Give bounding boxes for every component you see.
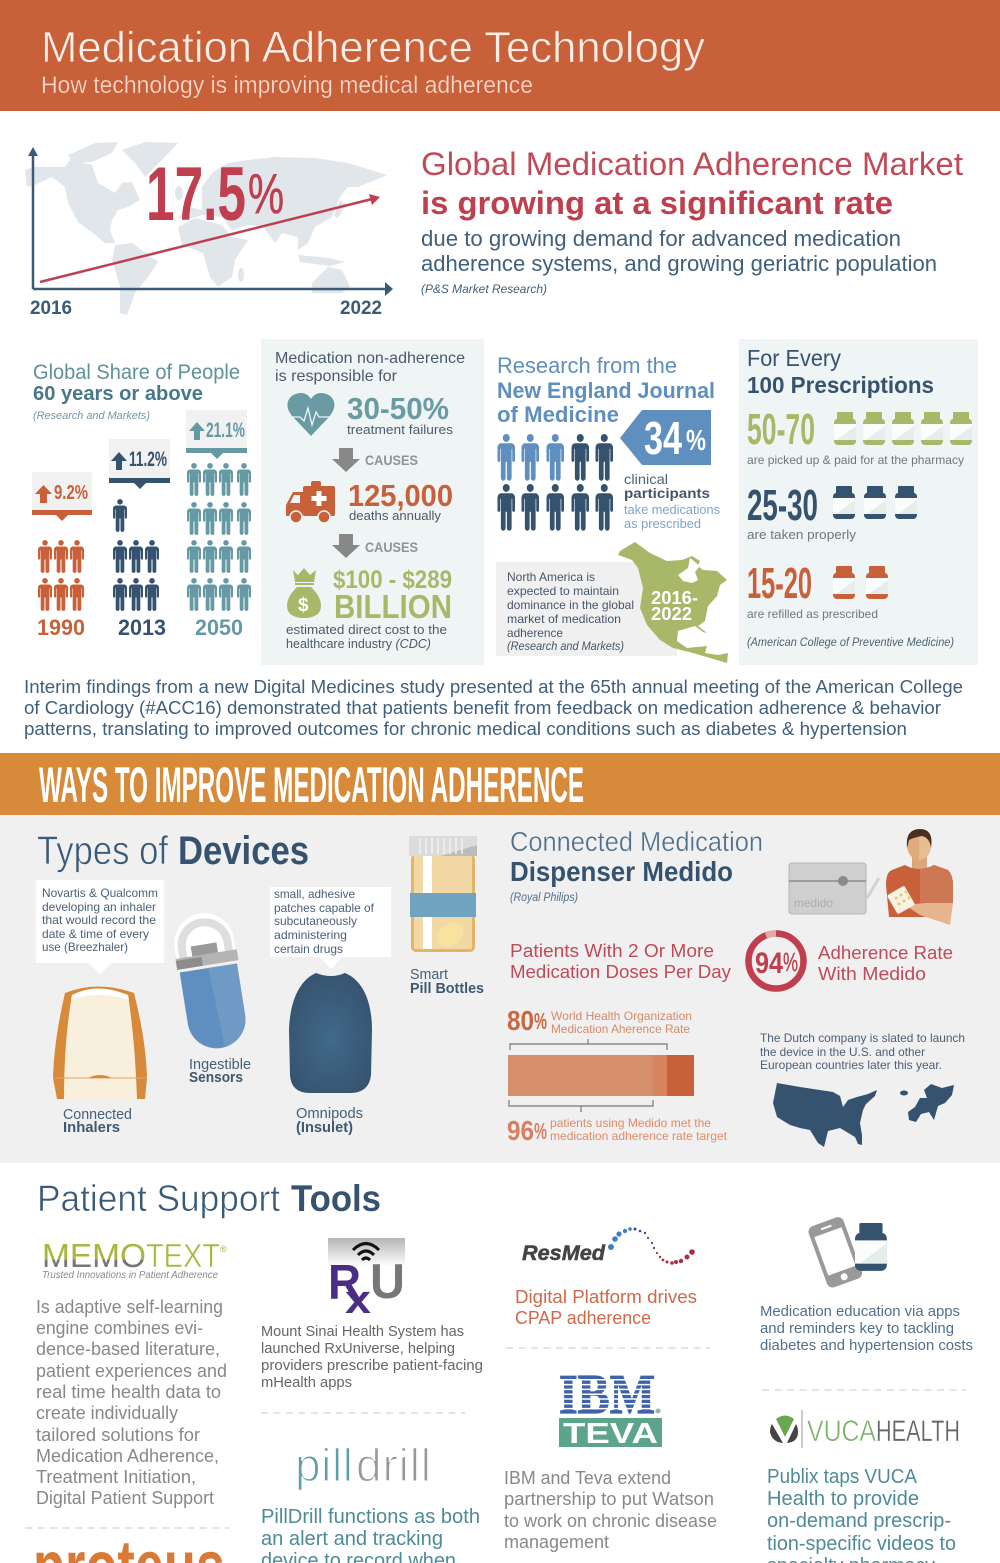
logo: VUCA Health: HEALTH [876, 1415, 960, 1448]
icon: dispenser device: medido [794, 896, 833, 910]
96 percent label [507, 1115, 728, 1146]
callout: inhaler: developing an inhaler [42, 900, 156, 914]
panel: for every 100 prescriptions [739, 339, 978, 665]
Memotext description: create individually [36, 1403, 178, 1423]
Memotext description: Treatment Initiation, [36, 1467, 196, 1487]
Memotext description [36, 1297, 227, 1508]
Memotext description: tailored solutions for [36, 1425, 200, 1445]
heading [37, 829, 309, 873]
heading: Devices [178, 829, 309, 873]
market growth heading: Global Medication Adherence Market [421, 146, 963, 182]
RxU description [261, 1324, 483, 1391]
tool: IBM and Teva [504, 1364, 717, 1552]
RxU description: launched RxUniverse, helping [261, 1341, 455, 1357]
tool: Memotext [36, 1237, 227, 1508]
logo: IBM Teva [555, 1364, 662, 1450]
panel heading: Medication non-adherence [275, 350, 465, 367]
96 percent label: medication adherence rate target [550, 1129, 728, 1143]
panel: non-adherence consequences [261, 339, 484, 665]
interim findings paragraph [24, 676, 963, 739]
2013 column: 11.2% [129, 448, 167, 471]
callout: patches: subcutaneously [274, 914, 357, 928]
IBM Teva description [504, 1468, 717, 1552]
trend arrow [40, 198, 376, 282]
VUCA description: Publix taps VUCA [767, 1466, 918, 1488]
panel: global share of people 60+ [32, 361, 251, 640]
market growth heading: is growing at a significant rate [421, 185, 893, 221]
96 percent label: patients using Medido met the [550, 1116, 711, 1130]
patients heading: Medication Doses Per Day [510, 962, 731, 982]
row: taken properly: are taken properly [747, 527, 857, 542]
apps description: Medication education via apps [760, 1304, 960, 1320]
participants text: clinical [624, 471, 668, 487]
ResMed description: CPAP adherence [515, 1307, 651, 1328]
device labels: Sensors [189, 1070, 243, 1086]
map: North America: 2022 [651, 604, 692, 624]
IBM Teva description: to work on chronic disease [504, 1511, 717, 1531]
row: picked up: are picked up & paid for at the pharmacy [747, 453, 964, 467]
interim findings paragraph: of Cardiology (#ACC16) demonstrated that patients benefit from feedback on medication adherence & behavior [24, 697, 941, 718]
source: (American College of Preventive Medicine) [747, 637, 954, 649]
Memotext description: Digital Patient Support [36, 1488, 214, 1508]
logo: IBM Teva: IBM [559, 1364, 655, 1426]
device labels: Smart [410, 967, 448, 983]
Memotext description: patient experiences and [36, 1361, 227, 1381]
North America box [496, 562, 677, 656]
icon: pill bottle [409, 836, 477, 952]
participants text [624, 471, 720, 531]
callout: inhaler: that would record the [42, 913, 156, 927]
icon: money bag: $ [298, 595, 309, 616]
header banner [0, 0, 1000, 111]
callout: patches [270, 887, 391, 969]
panel: Medido dispenser [507, 826, 965, 1147]
2013 column: 2013 [118, 615, 166, 640]
34 percent tag: % [686, 425, 706, 457]
IBM Teva description: management [504, 1532, 609, 1552]
logo: RxU: U [370, 1255, 405, 1309]
heading: Connected Medication [510, 826, 763, 857]
heading: Types of [37, 829, 169, 873]
logo: IBM Teva: TEVA [563, 1418, 658, 1450]
1990 column: 1990 [37, 615, 85, 640]
tool: RxUniverse [261, 1238, 483, 1391]
row: refilled: are refilled as prescribed [747, 607, 878, 621]
arrow: causes [332, 534, 418, 558]
donut: 94 percent: 94 [755, 947, 783, 980]
RxU description: Mount Sinai Health System has [261, 1324, 464, 1340]
axis years: 2016 [30, 298, 72, 319]
panel heading: is responsible for [275, 368, 398, 385]
world map [25, 142, 387, 315]
callout: inhaler: Novartis & Qualcomm [42, 886, 158, 900]
section background [0, 815, 1000, 1163]
logo: ResMed: ResMed [522, 1242, 606, 1265]
tool: PillDrill [261, 1439, 480, 1563]
North America text [507, 570, 634, 653]
callout: patches: patches capable of [274, 901, 375, 915]
2050 column: 21.1% [206, 419, 245, 442]
arrow: causes [332, 448, 418, 472]
tool: apps and reminders [760, 1215, 973, 1354]
row: taken properly [747, 481, 917, 542]
map: North America: 2016- [651, 588, 698, 608]
cost stat: $100 - $289 [333, 566, 452, 594]
apps description [760, 1304, 973, 1354]
Memotext description: engine combines evi- [36, 1318, 203, 1338]
IBM Teva description: partnership to put Watson [504, 1489, 714, 1509]
participants text: take medications [624, 502, 720, 517]
2050 column: 2050 [195, 615, 243, 640]
logo: Memotext: Trusted Innovations in Patient Adherence [42, 1270, 218, 1281]
heading: 60 years or above [33, 383, 203, 405]
logo: RxU: R [328, 1256, 361, 1310]
logo: PillDrill: pill [295, 1439, 353, 1491]
panel: types of devices [36, 829, 484, 1136]
apps description: and reminders key to tackling [760, 1321, 954, 1337]
device labels: Inhalers [63, 1120, 120, 1136]
VUCA description [767, 1466, 956, 1563]
logo: PillDrill: drill [356, 1439, 431, 1491]
adherence rate label: Adherence Rate [818, 942, 953, 963]
launch text [760, 1031, 965, 1072]
logo: RxU: x [345, 1278, 371, 1322]
logo: VUCA Health: VUCA [807, 1415, 876, 1448]
participants text: participants [624, 485, 710, 501]
growth value: % [248, 162, 284, 226]
device labels: Ingestible [189, 1057, 251, 1073]
Memotext description: Is adaptive self-learning [36, 1297, 223, 1317]
North America text: expected to maintain [507, 584, 619, 598]
deaths stat: 125,000 [348, 478, 453, 513]
tool: ResMed [515, 1227, 697, 1328]
heading: (Royal Philips) [510, 890, 578, 904]
growth chart with world map [25, 142, 393, 319]
heading [497, 353, 715, 427]
logo: Memotext: TEXT [146, 1237, 220, 1274]
logo: Memotext: MEMO [42, 1237, 146, 1274]
RxU description: providers prescribe patient-facing [261, 1358, 483, 1374]
RxU description: mHealth apps [261, 1375, 352, 1391]
adherence rate label: With Medido [818, 963, 926, 984]
row: picked up [747, 405, 972, 467]
cost stat: estimated direct cost to the [286, 622, 447, 637]
launch text: European countries later this year. [760, 1058, 942, 1072]
market growth heading: (P&S Market Research) [421, 282, 547, 296]
ResMed description [515, 1286, 697, 1328]
map: North America [618, 542, 728, 663]
map: United States [773, 1083, 877, 1147]
device labels [63, 967, 484, 1136]
tool: VUCA Health [767, 1410, 960, 1563]
market growth heading: due to growing demand for advanced medication [421, 226, 901, 251]
market growth heading [421, 146, 963, 296]
34 percent tag: 34 [644, 412, 682, 464]
heading: patient support tools: Tools [291, 1178, 381, 1219]
launch text: the device in the U.S. and other [760, 1045, 925, 1059]
icon: ambulance [286, 481, 335, 523]
North America text: market of medication [507, 612, 621, 626]
device labels: Connected [63, 1107, 132, 1123]
2013 column [109, 439, 170, 640]
heading [33, 361, 240, 422]
patients heading: Patients With 2 Or More [510, 941, 714, 961]
icon: heart [288, 393, 334, 436]
icon: ingestible sensor [169, 909, 252, 1053]
North America text: adherence [507, 626, 563, 640]
logo: ResMed [522, 1227, 695, 1265]
icon: dispenser device [789, 863, 879, 914]
row: refilled: 15-20 [747, 559, 812, 608]
axis years [30, 298, 382, 319]
80 percent label: Medication Aherence Rate [551, 1022, 690, 1036]
apps description: diabetes and hypertension costs [760, 1338, 973, 1354]
96 percent label: 96 [507, 1115, 534, 1146]
callout: inhaler: use (Breezhaler) [42, 940, 128, 954]
icon: inhaler [53, 986, 147, 1099]
treatment failures stat: treatment failures [347, 422, 454, 437]
VUCA description: tion-specific videos to [767, 1533, 956, 1555]
growth value: 17.5 [146, 152, 246, 237]
1990 column: 9.2% [54, 482, 88, 504]
participants text: as prescribed [624, 516, 701, 531]
Memotext description: dence-based literature, [36, 1339, 220, 1359]
icon: money bag [287, 568, 321, 618]
arrow: causes: CAUSES [365, 452, 418, 468]
device labels: Omnipods [296, 1106, 363, 1122]
PillDrill description: PillDrill functions as both [261, 1506, 480, 1528]
callout: patches: administering [274, 928, 347, 942]
launch text: The Dutch company is slated to launch [760, 1031, 965, 1045]
interim findings paragraph: patterns, translating to improved outcomes for chronic medical conditions such as diabetes & hypertension [24, 718, 907, 739]
row: taken properly: 25-30 [747, 481, 818, 530]
adherence rate label [818, 942, 953, 984]
North America text: (Research and Markets) [507, 639, 624, 653]
2050 column [186, 410, 251, 640]
96 percent label: % [534, 1118, 547, 1144]
panel heading: 100 Prescriptions [747, 372, 934, 398]
interim findings paragraph: Interim findings from a new Digital Medicines study presented at the 65th annual meeting of the American College [24, 676, 963, 697]
panel: New England Journal research [496, 353, 728, 663]
Memotext description: real time health data to [36, 1382, 221, 1402]
PillDrill description [261, 1506, 480, 1563]
callout: inhaler: date & time of every [42, 927, 149, 941]
logo: RxU [328, 1238, 405, 1322]
bar chart: adherence comparison [507, 1005, 728, 1146]
title: Medication Adherence Technology [41, 23, 705, 72]
donut: 94 percent [748, 934, 804, 988]
logo: Memotext [42, 1237, 227, 1281]
heading: (Research and Markets) [33, 410, 150, 422]
row: picked up: 50-70 [747, 405, 815, 454]
callout: patches: certain drugs [274, 942, 343, 956]
80 percent label: World Health Organization [551, 1009, 692, 1023]
callout: patches: small, adhesive [274, 887, 355, 901]
IBM Teva description: IBM and Teva extend [504, 1468, 671, 1488]
deaths stat: deaths annually [349, 508, 441, 523]
panel heading: For Every [747, 345, 841, 371]
people grid [498, 434, 613, 531]
North America text: North America is [507, 570, 595, 584]
heading [510, 826, 763, 904]
heading: patient support tools: Patient Support [37, 1178, 281, 1219]
row: refilled [747, 559, 888, 621]
subtitle: How technology is improving medical adherence [41, 72, 533, 99]
cost stat: healthcare industry (CDC) [286, 636, 431, 651]
panel heading [275, 350, 465, 385]
logo: VUCA Health [770, 1410, 960, 1448]
icon: person with pills [886, 829, 953, 925]
heading: Research from the [497, 353, 677, 378]
heading: New England Journal [497, 378, 715, 403]
heading: Global Share of People [33, 361, 240, 384]
1990 column [32, 472, 92, 640]
map: Europe [900, 1084, 954, 1122]
device labels: Pill Bottles [410, 981, 484, 997]
VUCA description: on-demand prescrip- [767, 1510, 951, 1532]
logo: PillDrill [295, 1439, 431, 1491]
patients heading [510, 941, 731, 982]
34 percent tag [620, 410, 711, 465]
icon: phone and bottle [807, 1215, 887, 1289]
arrow: causes: CAUSES [365, 539, 418, 555]
North America text: dominance in the global [507, 598, 634, 612]
Memotext description: Medication Adherence, [36, 1446, 219, 1466]
80 percent label [507, 1005, 692, 1036]
cost stat: BILLION [334, 588, 452, 625]
80 percent label: 80 [507, 1005, 534, 1036]
axis years: 2022 [340, 298, 382, 319]
callout: inhaler [36, 880, 164, 974]
ResMed description: Digital Platform drives [515, 1286, 697, 1307]
PillDrill description: an alert and tracking [261, 1528, 443, 1550]
80 percent label: % [534, 1008, 547, 1034]
axes [33, 152, 388, 289]
heading: of Medicine [497, 402, 619, 427]
heading: Dispenser Medido [510, 856, 733, 887]
market growth heading: adherence systems, and growing geriatric population [421, 251, 937, 276]
device labels: (Insulet) [296, 1120, 353, 1136]
cost stat [286, 566, 452, 651]
logo: Memotext: ® [220, 1244, 227, 1254]
icon: omnipod [289, 973, 372, 1093]
VUCA description: Health to provide [767, 1488, 919, 1510]
donut: 94 percent: % [783, 947, 798, 977]
panel heading [747, 345, 934, 398]
treatment failures stat: 30-50% [347, 391, 449, 426]
